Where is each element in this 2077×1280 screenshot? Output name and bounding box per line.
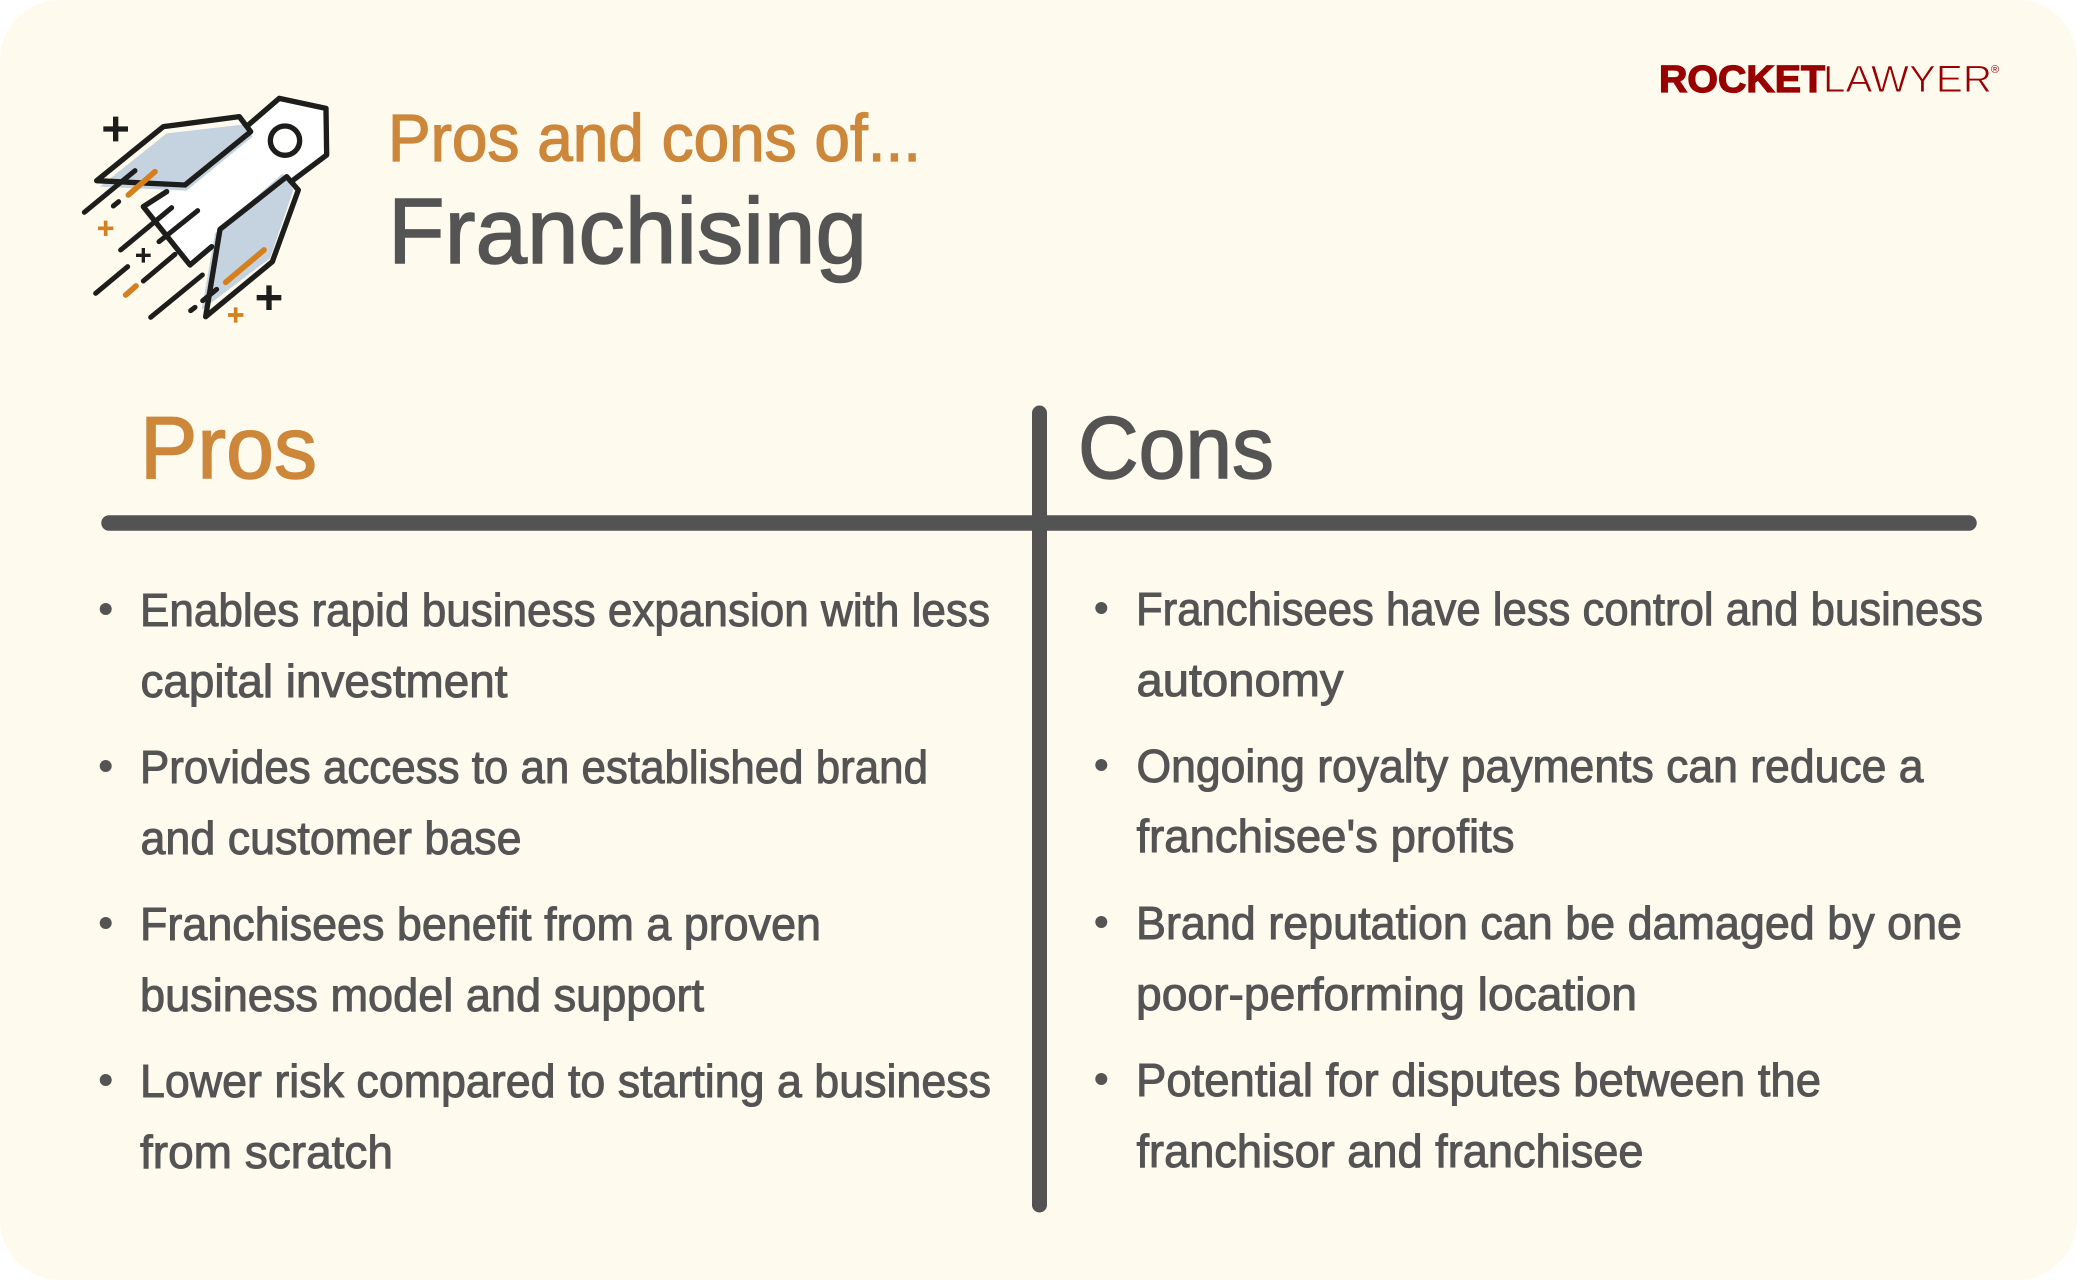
table divider: horizontal rule bbox=[109, 515, 1969, 531]
pro item 4: from scratch bbox=[140, 1126, 393, 1178]
icon: rocket bbox=[84, 98, 327, 323]
con item 2: franchisee's profits bbox=[1136, 810, 1514, 862]
pros list bbox=[100, 584, 991, 1178]
table divider: vertical rule bbox=[1032, 413, 1047, 1205]
pro item 1 bbox=[100, 584, 990, 707]
pro item 3: Franchisees benefit from a proven bbox=[140, 898, 821, 950]
heading: Cons: Cons bbox=[1078, 398, 1274, 497]
con item 3 bbox=[1095, 897, 1962, 1020]
cons list bbox=[1095, 583, 1983, 1177]
logo: Rocket Lawyer bbox=[1659, 59, 1999, 101]
logo: Rocket Lawyer: LAWYER bbox=[1823, 59, 1992, 101]
pro item 2 bbox=[100, 741, 928, 864]
logo: Rocket Lawyer: ® bbox=[1991, 64, 1999, 76]
pro item 1: Enables rapid business expansion with less bbox=[140, 584, 990, 636]
pro item 3 bbox=[100, 898, 821, 1021]
pro item 4 bbox=[100, 1055, 991, 1178]
logo: Rocket Lawyer: ROCKET bbox=[1659, 59, 1825, 101]
con item 1: autonomy bbox=[1136, 654, 1344, 706]
pro item 3: business model and support bbox=[140, 969, 704, 1021]
heading: Pros: Pros bbox=[140, 398, 317, 497]
con item 1 bbox=[1095, 583, 1983, 706]
con item 4: franchisor and franchisee bbox=[1136, 1125, 1644, 1177]
con item 3: poor-performing location bbox=[1136, 968, 1637, 1020]
subtitle: Pros and cons of... bbox=[388, 102, 921, 176]
pro item 1: capital investment bbox=[140, 655, 508, 707]
pro item 2: Provides access to an established brand bbox=[140, 741, 928, 793]
pro item 2: and customer base bbox=[140, 812, 522, 864]
title: Franchising bbox=[388, 179, 867, 283]
con item 4: Potential for disputes between the bbox=[1136, 1054, 1821, 1106]
con item 1: Franchisees have less control and business bbox=[1136, 583, 1983, 635]
con item 2 bbox=[1095, 740, 1924, 862]
pro item 4: Lower risk compared to starting a business bbox=[140, 1055, 991, 1107]
con item 2: Ongoing royalty payments can reduce a bbox=[1136, 740, 1924, 792]
con item 3: Brand reputation can be damaged by one bbox=[1136, 897, 1962, 949]
con item 4 bbox=[1095, 1054, 1821, 1177]
